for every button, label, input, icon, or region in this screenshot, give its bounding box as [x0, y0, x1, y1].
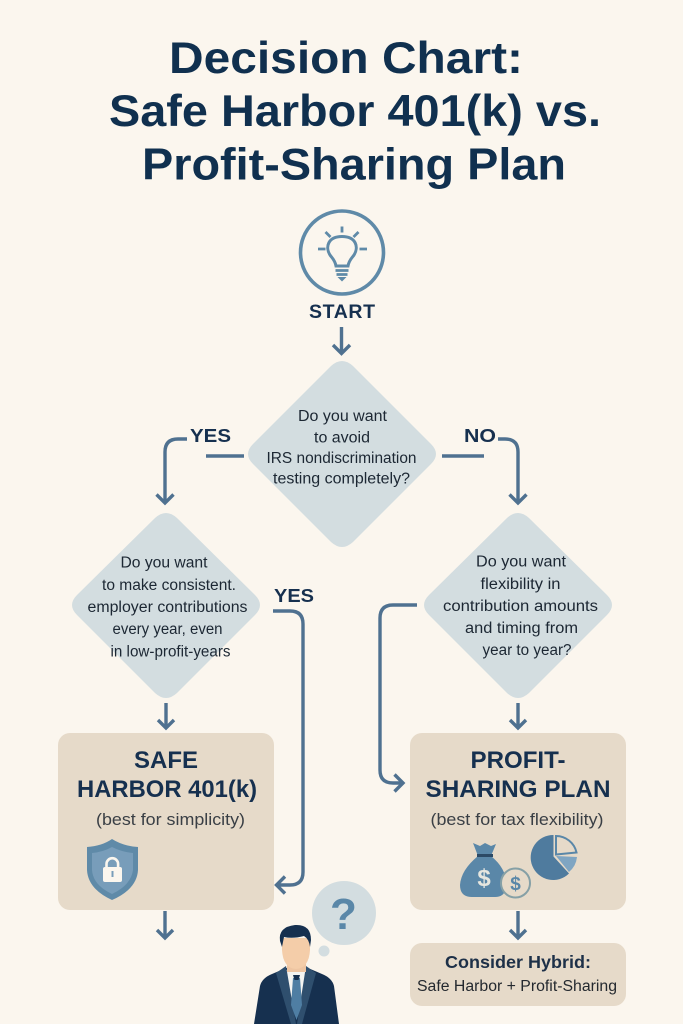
panel: profit-sharing box: (best for tax flexibility) — [430, 810, 604, 829]
panel: safe harbor box: HARBOR 401(k) — [77, 776, 257, 803]
arrow: yes to question 2 — [156, 439, 244, 503]
panel: question 1 diamond: testing completely? — [273, 470, 410, 488]
panel: safe harbor box: SAFE — [134, 747, 198, 774]
arrow: start to question 1 — [333, 327, 350, 354]
arrow: no to question 3 — [442, 439, 526, 503]
start label: START — [309, 301, 375, 323]
arrow: question 2 to safe harbor — [158, 703, 174, 728]
panel: consider hybrid box — [410, 943, 626, 1006]
arrow: profit-sharing to hybrid — [510, 911, 526, 938]
icon: money bag: $ — [477, 865, 491, 892]
label: no right: NO — [464, 425, 496, 446]
arrow: yes to safe harbor — [273, 611, 303, 894]
icon: thought bubble with question mark — [312, 881, 376, 956]
panel: profit-sharing box: PROFIT- — [470, 747, 566, 774]
icon: businessman — [254, 925, 339, 1024]
panel: profit-sharing box — [410, 733, 626, 910]
icon: shield with lock — [87, 839, 138, 900]
panel: question 1 diamond — [248, 361, 436, 547]
panel: question 2 diamond: every year, even — [112, 621, 222, 638]
title — [109, 34, 601, 190]
panel: question 2 diamond: Do you want — [120, 554, 208, 572]
panel: question 3 diamond: and timing from — [465, 620, 578, 637]
icon: start lightbulb — [300, 211, 384, 294]
panel: safe harbor box — [58, 733, 274, 910]
panel: question 2 diamond — [72, 513, 260, 698]
title: Safe Harbor 401(k) vs. — [109, 87, 601, 136]
arrow: safe harbor down — [157, 911, 173, 938]
panel: question 3 diamond: year to year? — [482, 642, 572, 659]
title: Decision Chart: — [169, 34, 523, 83]
icon: coin: $ — [510, 874, 521, 895]
panel: question 3 diamond: flexibility in — [480, 576, 560, 593]
panel: question 1 diamond: Do you want — [298, 408, 388, 425]
panel: question 3 diamond: contribution amounts — [443, 598, 598, 615]
panel: safe harbor box: (best for simplicity) — [96, 810, 245, 829]
panel: question 1 diamond: IRS nondiscrimination — [266, 450, 416, 467]
panel: question 2 diamond: to make consistent. — [102, 577, 236, 594]
panel: question 3 diamond: Do you want — [476, 554, 567, 570]
panel: question 3 diamond — [424, 513, 612, 698]
panel: consider hybrid box: Safe Harbor + Profit-Sharing — [417, 978, 617, 995]
panel: question 1 diamond: to avoid — [314, 430, 370, 446]
icon: coin — [501, 868, 530, 898]
panel: consider hybrid box: Consider Hybrid: — [445, 952, 591, 972]
icon: money bag — [460, 843, 506, 897]
label: yes second: YES — [274, 585, 314, 606]
panel: profit-sharing box: SHARING PLAN — [426, 776, 610, 803]
icon: pie chart — [531, 835, 577, 880]
panel: question 2 diamond: employer contributions — [88, 599, 248, 616]
arrow: question 3 to profit-sharing — [380, 605, 417, 792]
arrow: question 3 to profit-sharing box — [510, 703, 526, 728]
title: Profit-Sharing Plan — [142, 140, 566, 190]
panel: question 2 diamond: in low-profit-years — [110, 644, 231, 660]
label: yes left: YES — [190, 425, 231, 446]
icon: thought bubble with question mark: ? — [330, 890, 357, 939]
